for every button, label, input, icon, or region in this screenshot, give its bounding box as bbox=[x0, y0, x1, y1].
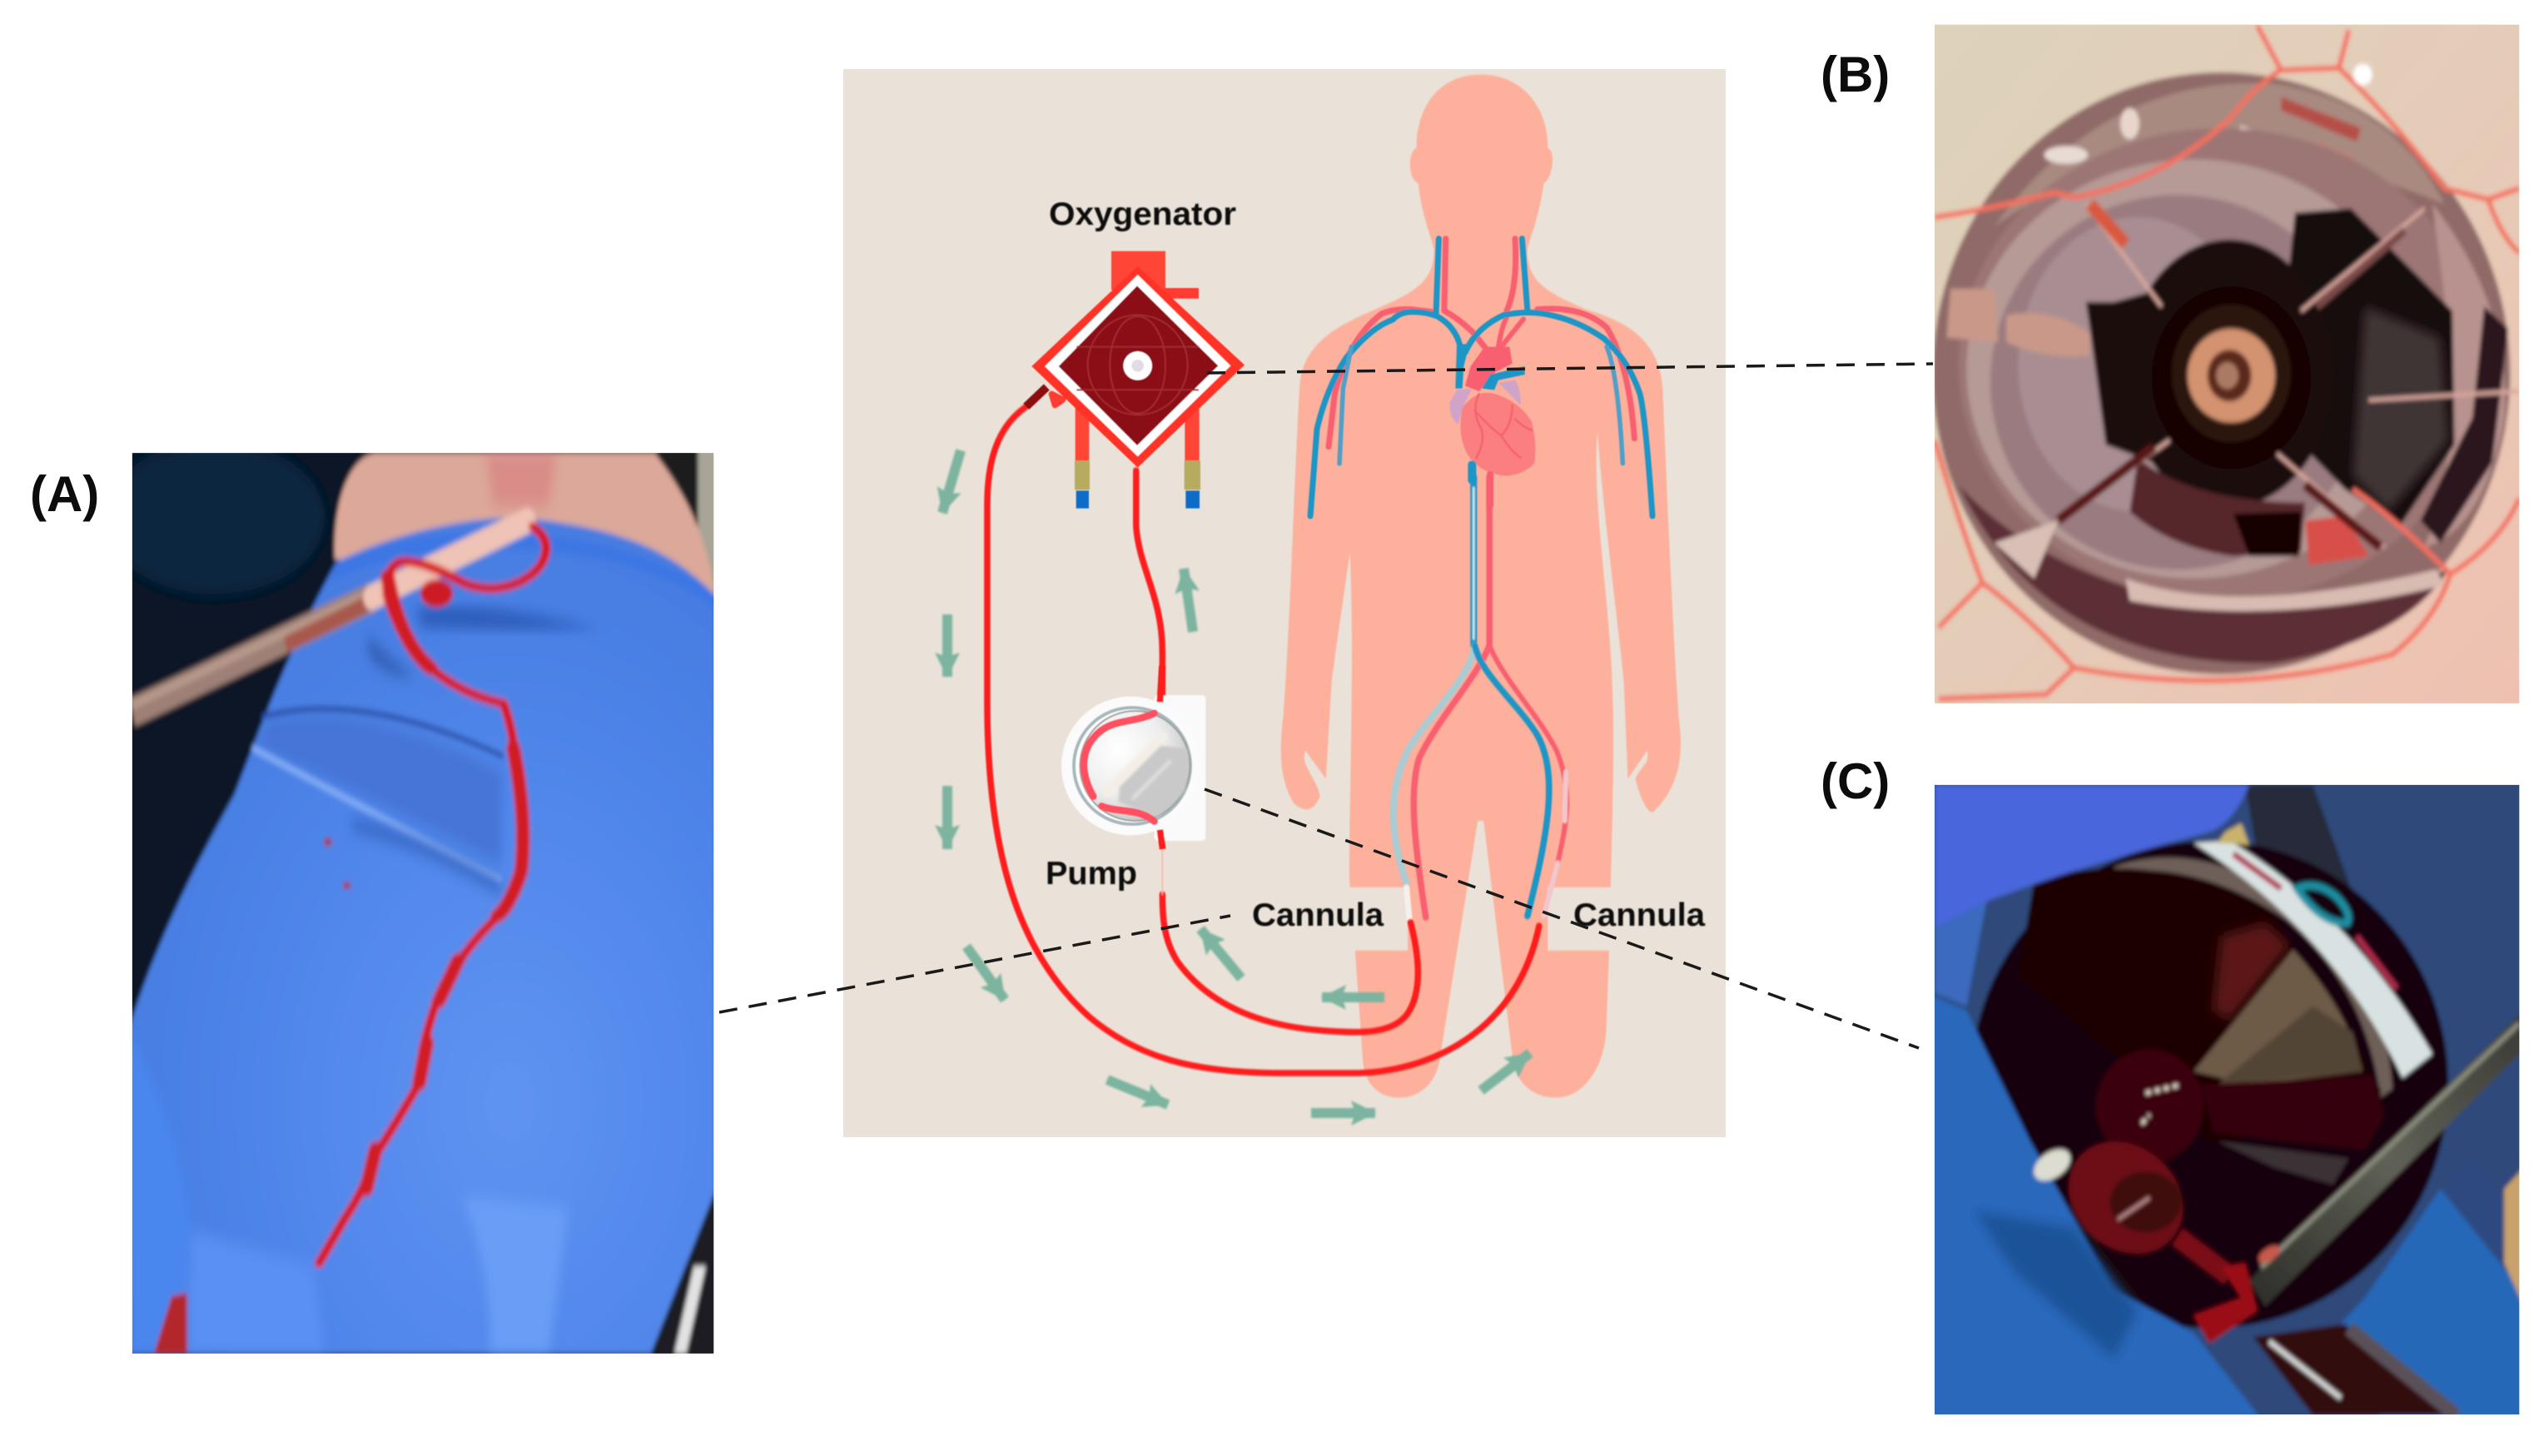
label: Oxygenator: Oxygenator bbox=[1049, 196, 1236, 232]
dashed leader: oxygenator to panel B bbox=[1207, 364, 1933, 373]
flow arrows bbox=[942, 450, 1530, 1113]
label: (B): (B) bbox=[1821, 47, 1890, 102]
panel: ECMO circuit diagram bbox=[843, 69, 1726, 1137]
photo B: oxygenator interior with clot bbox=[1926, 17, 2528, 713]
upper body vessels and heart bbox=[1310, 239, 1652, 516]
human body silhouette bbox=[1281, 74, 1681, 1097]
label: Pump: Pump bbox=[1046, 856, 1137, 892]
label: right Cannula: Cannula bbox=[1573, 897, 1705, 933]
tube: return line and drainage line bbox=[987, 407, 1539, 1073]
dashed leader: pump to panel C bbox=[1205, 789, 1919, 1048]
lower body vessels bbox=[1394, 477, 1567, 919]
photo C: pump head with clot bbox=[1926, 775, 2528, 1424]
label: left Cannula: Cannula bbox=[1252, 897, 1384, 933]
label: (C): (C) bbox=[1821, 753, 1890, 809]
photo A: clot on gloved hand bbox=[105, 441, 722, 1366]
dashed leader: panel A to cannula bbox=[719, 916, 1230, 1012]
pump bbox=[1061, 666, 1205, 849]
oxygenator bbox=[1026, 251, 1245, 509]
label: (A): (A) bbox=[30, 466, 99, 522]
